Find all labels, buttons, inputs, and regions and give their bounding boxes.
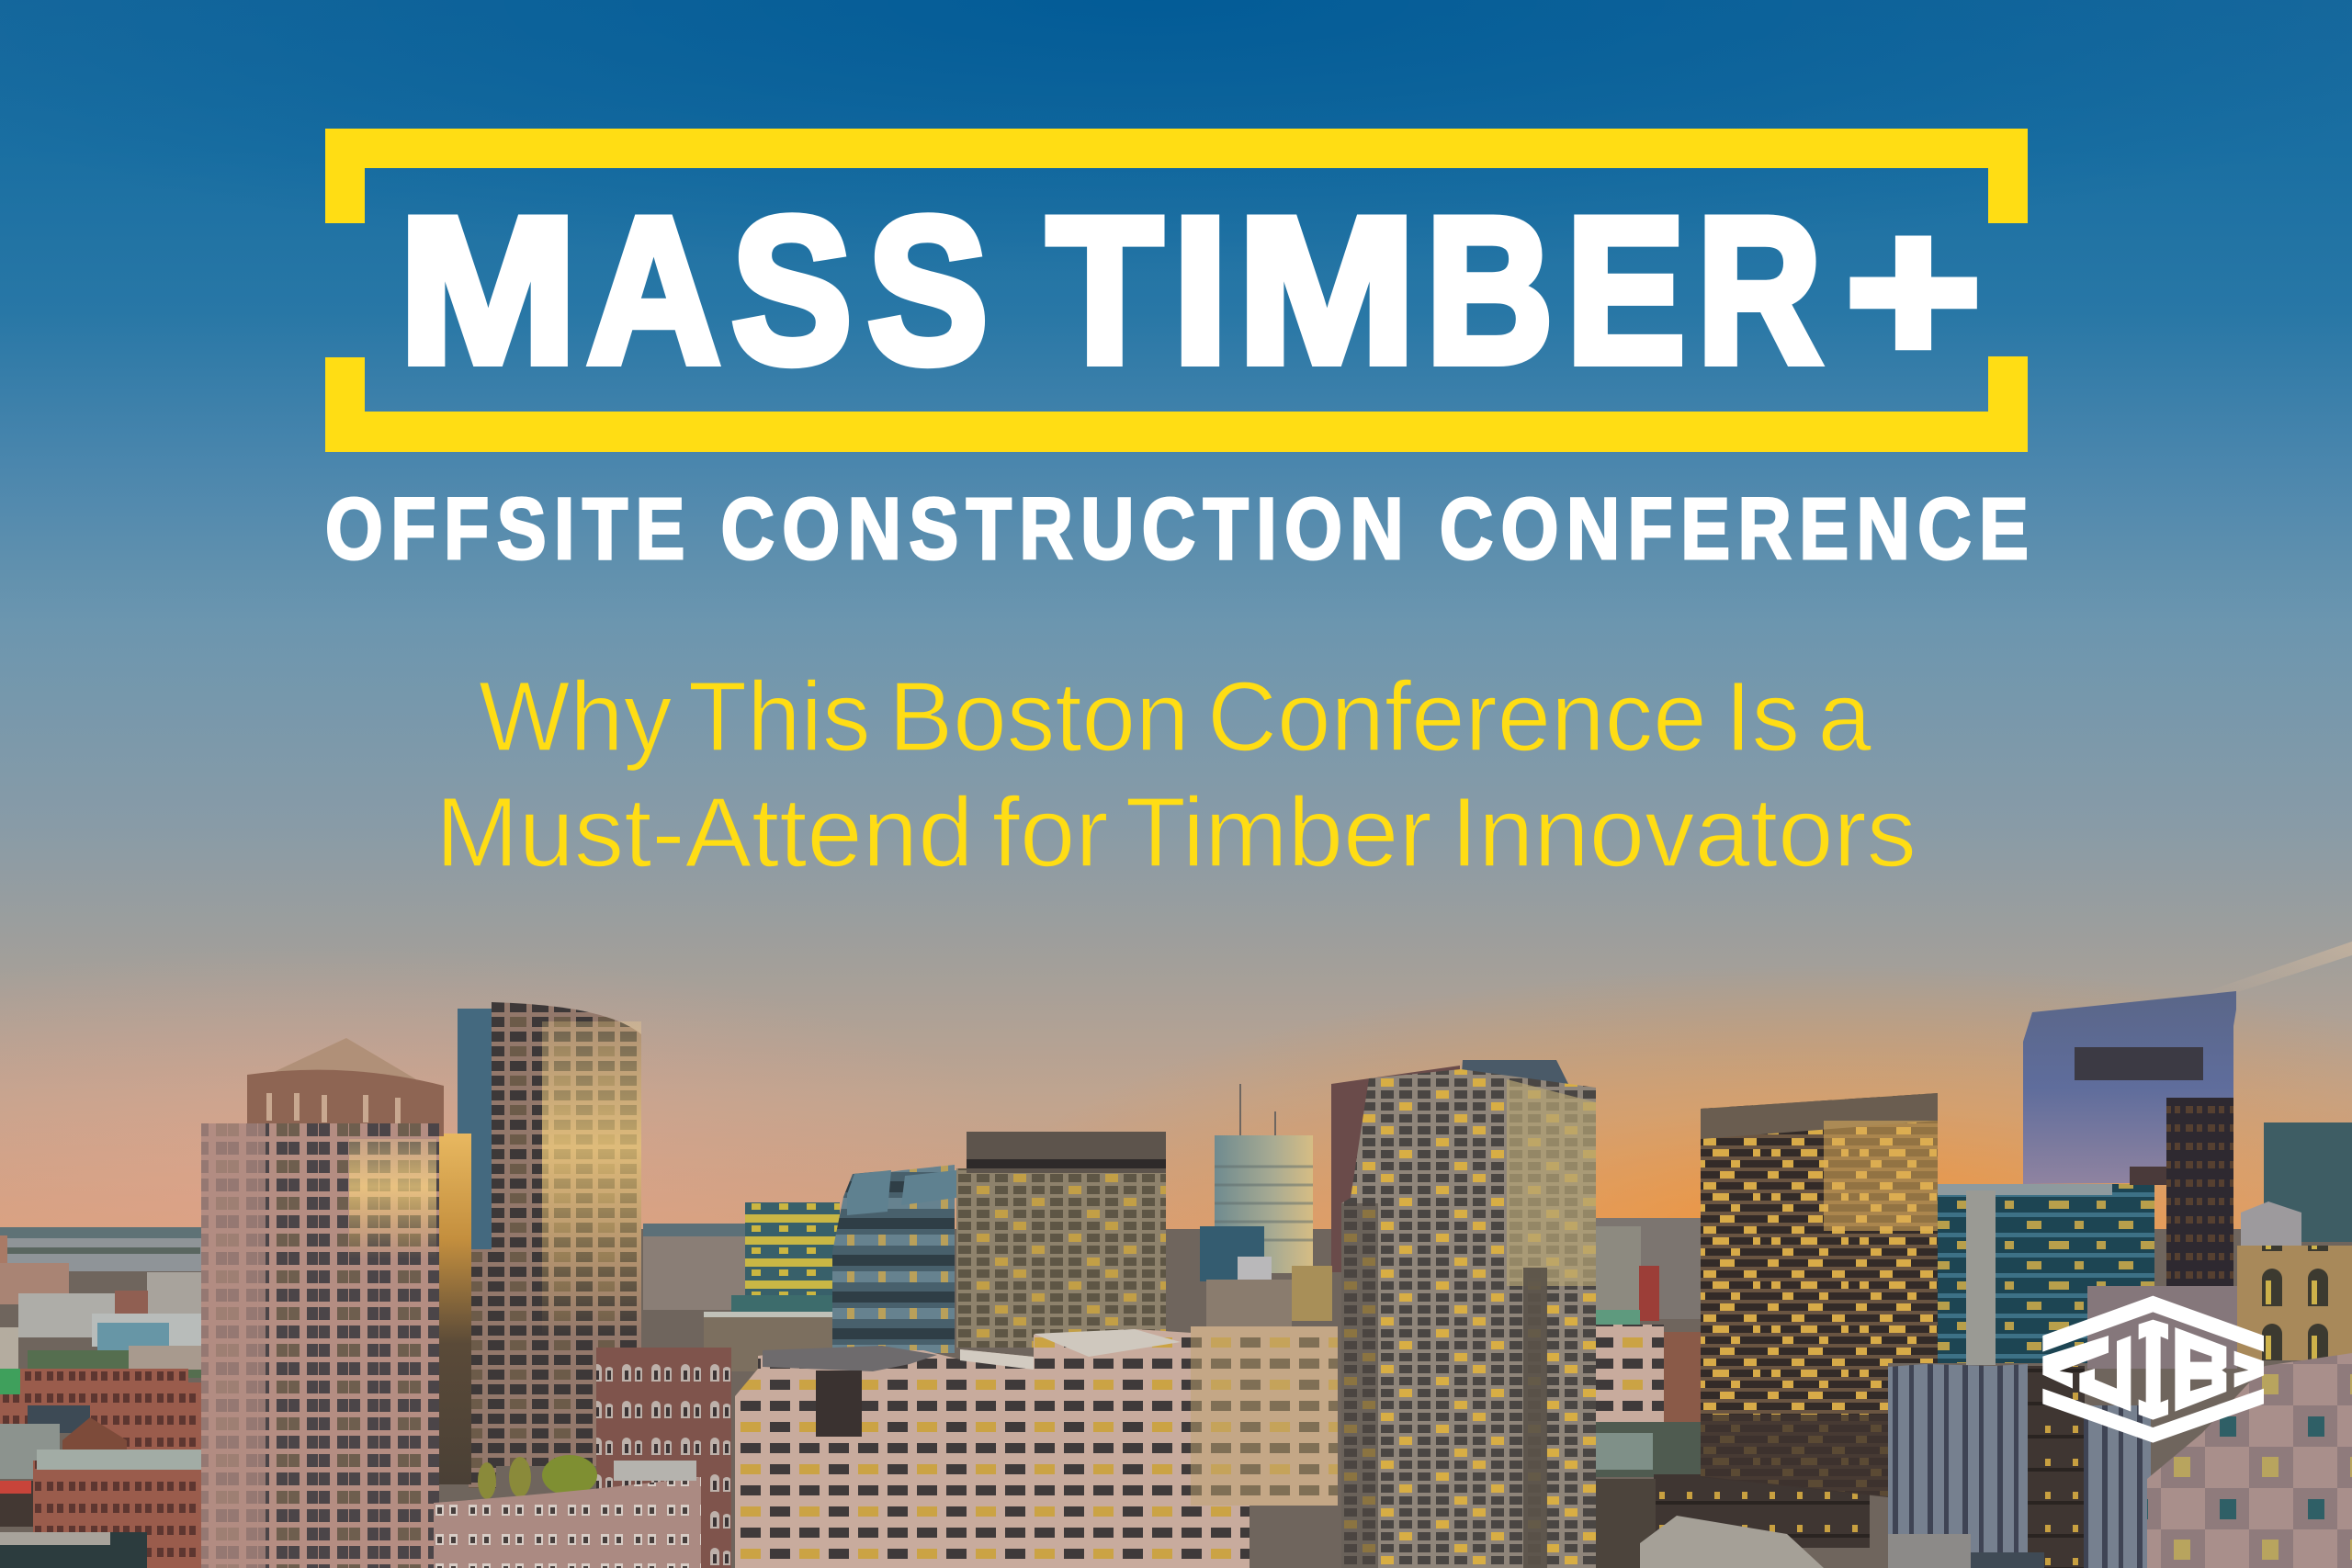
foreground low rooftops <box>1888 1534 2044 1568</box>
tower: round glass cylinder <box>458 1002 641 1488</box>
title: MASS TIMBER+: B <box>1426 174 1554 406</box>
tall grey office tower with lit windows <box>1341 1060 1596 1568</box>
tall gold-lit office tower <box>1701 1093 1938 1497</box>
icon: JIB hexagon logo <box>2042 1296 2264 1443</box>
logo frame: yellow bracket bottom <box>325 356 2028 452</box>
tower: cream setback block <box>735 1346 960 1568</box>
low-rise district, left <box>0 1235 204 1568</box>
tower: maroon behind <box>1331 1066 1460 1272</box>
low buildings between towers <box>1596 1226 1870 1568</box>
mid-rise: teal-topped block <box>704 1202 891 1371</box>
glass curtain-wall tower <box>2023 991 2236 1288</box>
photo: Boston skyline <box>0 991 2352 1568</box>
title: MASS TIMBER+: S <box>867 174 988 406</box>
title: MASS TIMBER+: A <box>587 174 720 406</box>
title: MASS TIMBER+: T <box>1047 174 1162 406</box>
tower: brick arched windows <box>596 1348 731 1568</box>
low pink curved block <box>434 1461 701 1568</box>
tower: blue stepped glass <box>832 1165 956 1353</box>
ornate gold deco building <box>2237 1246 2352 1360</box>
teal office block with gold lights <box>1938 1184 2154 1365</box>
headline line two: Must-Attend for Timber Innovators <box>435 776 1917 887</box>
title: MASS TIMBER+: E <box>1566 174 1685 406</box>
grey-pink block behind logo <box>2087 1286 2237 1369</box>
title: MASS TIMBER+: + <box>1845 174 1981 406</box>
title: MASS TIMBER+: M <box>1238 174 1416 406</box>
title: MASS TIMBER+: S <box>731 174 852 406</box>
tower: tan office slab <box>956 1132 1166 1348</box>
logo frame: yellow bracket top <box>325 129 2028 223</box>
title: MASS TIMBER+: R <box>1697 174 1822 406</box>
distant tower, far right <box>2241 1122 2352 1249</box>
rooftop terrace trees <box>478 1455 597 1499</box>
headline line one: Why This Boston Conference Is a <box>479 660 1872 772</box>
title: MASS TIMBER+: I <box>1172 174 1228 406</box>
tower: pink granite with pyramid roof <box>201 1038 444 1568</box>
blue-grey stone tower <box>1888 1364 2151 1568</box>
patterned checker facade <box>2147 1353 2352 1568</box>
tower: gold glass strip <box>435 1134 471 1484</box>
title: MASS TIMBER+: M <box>399 174 577 406</box>
subtitle: conference name: OFFSITE CONSTRUCTION CONFERENCE <box>325 479 2029 577</box>
stepped stone tower <box>1191 1257 1338 1506</box>
tower: cream tall block <box>960 1329 1250 1568</box>
distant ground and harbor <box>0 1218 2352 1568</box>
distant: Prudential tower <box>1200 1084 1313 1281</box>
